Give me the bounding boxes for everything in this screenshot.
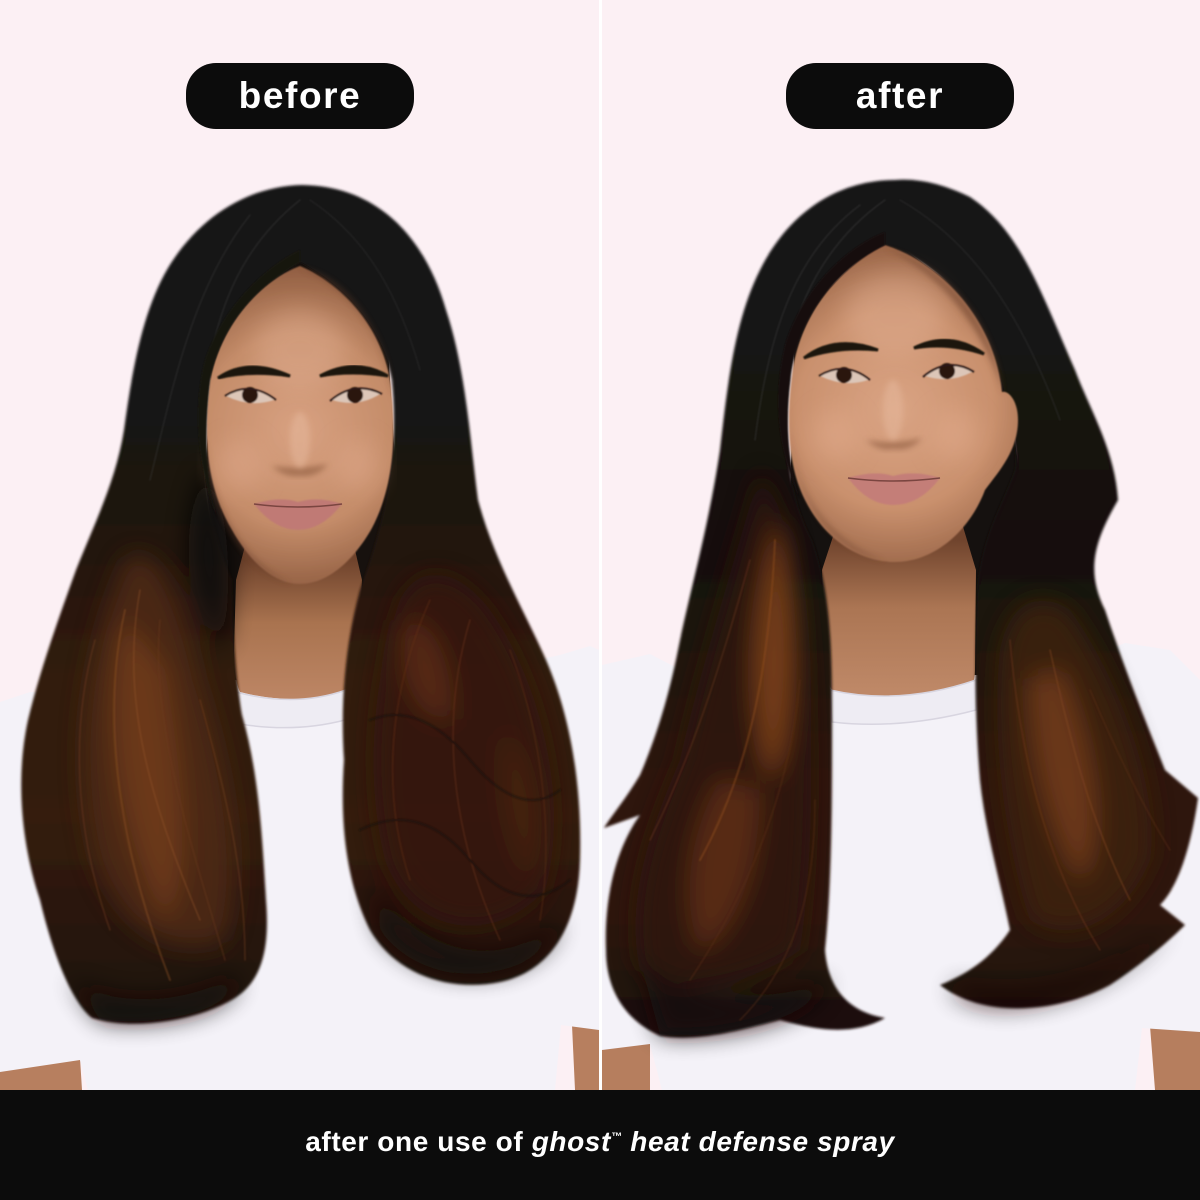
hair strands: [650, 200, 1170, 1020]
label: after: after: [856, 75, 944, 116]
hair shape: [21, 185, 580, 1024]
eyes: [225, 387, 382, 403]
lips: [254, 499, 342, 530]
hair highlights: [70, 470, 560, 1022]
panel: after photo: [602, 180, 1200, 1090]
back hair behind face: [790, 235, 1020, 675]
nose: [272, 464, 328, 476]
white t-shirt: [602, 1026, 1200, 1050]
label: before: before: [239, 75, 361, 116]
shirt collar: [830, 680, 976, 724]
shirt collar: [236, 690, 346, 728]
footer caption bar: [0, 1090, 1200, 1200]
eyes: [819, 363, 974, 383]
lips: [848, 473, 940, 505]
white t-shirt: [0, 1025, 599, 1072]
hair strands: [79, 200, 570, 980]
footer caption bar: after one use of ghost™ heat defense spray: [305, 1126, 895, 1157]
arms: [602, 1026, 1200, 1090]
eyebrows: [804, 340, 984, 358]
neck: [234, 548, 362, 699]
front hair strands: [778, 232, 885, 500]
front hair strands: [198, 250, 300, 520]
arms: [0, 1025, 599, 1090]
face shading: [790, 248, 1003, 561]
face shading: [205, 268, 392, 583]
label: after: [786, 63, 1014, 129]
face: [789, 245, 1018, 562]
back hair behind face: [205, 250, 395, 680]
hair shape: [604, 180, 1198, 1038]
label: before: [186, 63, 414, 129]
face: [205, 266, 393, 584]
hair highlights: [636, 470, 1170, 1036]
panel: before photo: [0, 185, 599, 1090]
nose: [866, 438, 922, 450]
eyebrows: [218, 366, 388, 378]
neck: [822, 526, 976, 696]
